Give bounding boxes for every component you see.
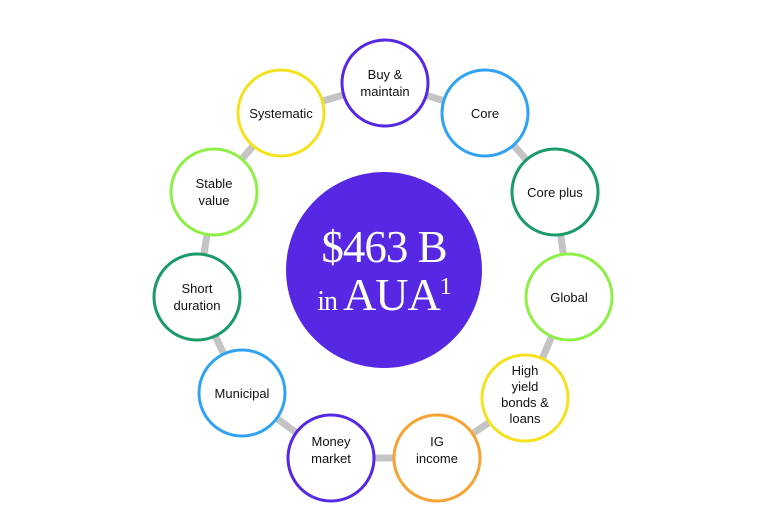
- node: Municipal: Municipal: [215, 386, 270, 401]
- node: Stable value: [171, 149, 257, 235]
- node: IG income: IG: [430, 434, 444, 449]
- node: Global: Global: [550, 290, 588, 305]
- node: Stable value: Stable: [196, 176, 232, 191]
- node: Money market: Money: [311, 434, 351, 449]
- node: High yield bonds & loans: High: [512, 363, 538, 378]
- node: Money market: [288, 415, 374, 501]
- node: Municipal: [199, 350, 285, 436]
- node: Core plus: Core plus: [527, 185, 583, 200]
- node: Global: [526, 254, 612, 340]
- node: Core: Core: [471, 106, 499, 121]
- node: Buy & maintain: maintain: [360, 84, 410, 99]
- node: Buy & maintain: [342, 40, 428, 126]
- node: Short duration: duration: [174, 298, 220, 313]
- node: Stable value: value: [198, 193, 230, 208]
- node: High yield bonds & loans: [482, 355, 568, 441]
- node: Systematic: Systematic: [249, 106, 313, 121]
- node: Money market: market: [311, 451, 351, 466]
- node: Buy & maintain: Buy &: [368, 67, 403, 82]
- node: Systematic: [238, 70, 324, 156]
- center circle: $463 B in AUA: 1: [440, 274, 451, 300]
- node: Core: [442, 70, 528, 156]
- center circle: $463 B in AUA: [286, 172, 482, 368]
- node: High yield bonds & loans: yield: [512, 379, 538, 394]
- node: IG income: income: [416, 451, 458, 466]
- node: IG income: [394, 415, 480, 501]
- node: Short duration: [154, 254, 240, 340]
- center circle: $463 B in AUA: $463 B: [321, 222, 447, 272]
- node: High yield bonds & loans: loans: [509, 411, 541, 426]
- center circle: $463 B in AUA: in AUA: [317, 269, 440, 320]
- connectors: [197, 83, 569, 458]
- node: Short duration: Short: [181, 281, 213, 296]
- node: Core plus: [512, 149, 598, 235]
- node: High yield bonds & loans: bonds &: [501, 395, 549, 410]
